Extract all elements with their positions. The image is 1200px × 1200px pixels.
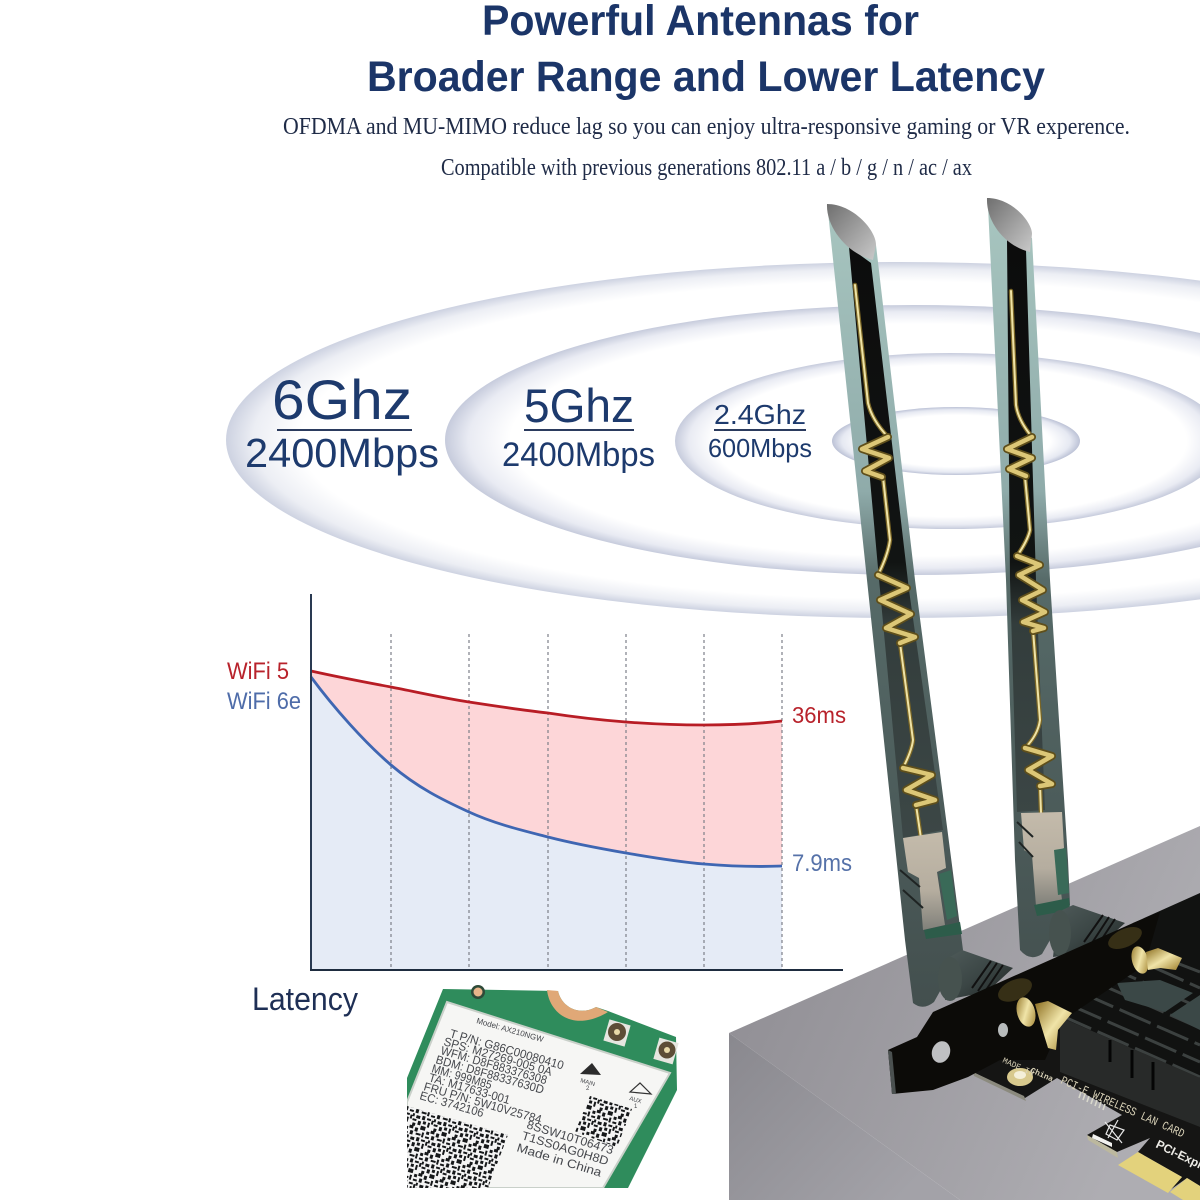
aux antenna marker: AUX <box>628 1096 642 1105</box>
module label text: WFM: D8F883376308 <box>439 1043 549 1087</box>
subtitle text <box>283 114 1130 181</box>
label: 6Ghz 2400Mbps: 6Ghz <box>272 368 412 431</box>
module label text: Made in China <box>515 1140 604 1180</box>
module label text: SPS: M27269-005 0A <box>442 1034 554 1079</box>
antenna tip cap <box>827 204 876 260</box>
value: 36ms: 36ms <box>792 702 846 728</box>
module label text: FRU P/N: 5W10V25784 <box>422 1079 544 1127</box>
circuit board <box>973 1000 1200 1190</box>
antenna inner core <box>1007 240 1045 812</box>
wifi pcie card <box>888 893 1200 1200</box>
label: 2.4Ghz 600Mbps: 600Mbps <box>708 433 812 463</box>
small data matrix code <box>575 1096 632 1147</box>
heatsink <box>1060 893 1200 1127</box>
module circuit board <box>407 989 677 1188</box>
front antenna <box>827 204 963 1007</box>
pads row <box>1079 1092 1105 1110</box>
label sticker <box>407 1002 670 1188</box>
antenna swivel front <box>938 950 1013 1001</box>
value: 7.9ms: 7.9ms <box>792 850 852 877</box>
mounting pad <box>471 985 485 999</box>
antenna body <box>988 206 1070 957</box>
antenna connector 1 <box>653 1038 679 1064</box>
bracket glare <box>994 974 1036 1006</box>
rear SMA connector <box>1129 944 1182 976</box>
coil wire <box>855 285 935 865</box>
module label text <box>418 1016 616 1180</box>
antenna base insert <box>1021 812 1064 906</box>
antenna base insert <box>903 832 946 930</box>
label: 2.4Ghz 600Mbps: 2.4Ghz <box>714 399 806 430</box>
antenna tip cap <box>987 198 1032 252</box>
title: Broader Range and Lower Latency <box>367 53 1045 101</box>
main antenna marker <box>579 1063 601 1092</box>
title <box>367 0 1045 101</box>
board silkscreen text <box>1001 1057 1200 1181</box>
module label text: MM: 999M85 <box>430 1061 494 1092</box>
metal bracket <box>888 912 1160 1094</box>
label: 5Ghz 2400Mbps <box>502 379 655 474</box>
module label text: BDM: D8F88337630D <box>434 1052 546 1097</box>
board silkscreen text: MADE IN <box>1001 1057 1035 1078</box>
aux antenna marker <box>628 1083 651 1110</box>
board silkscreen text: China <box>1029 1067 1055 1085</box>
module label text: T1SS0AG0H8D <box>520 1128 611 1168</box>
subtitle text: Compatible with previous generations 802.11 a / b / g / n / ac / ax <box>441 155 972 181</box>
gold edge fingers <box>1118 1152 1182 1193</box>
antenna swivel rear <box>1049 905 1125 957</box>
rear antenna <box>987 198 1070 957</box>
bracket screw hole <box>929 1039 953 1065</box>
label: 6Ghz 2400Mbps: 2400Mbps <box>245 430 439 476</box>
label: 6Ghz 2400Mbps <box>245 368 439 476</box>
label: 5Ghz 2400Mbps: 2400Mbps <box>502 436 655 474</box>
module label text: T P/N: G86C00080410 <box>448 1026 566 1072</box>
recycling mark <box>1092 1120 1124 1147</box>
legend: WiFi 6e: WiFi 6e <box>227 688 301 715</box>
label: 5Ghz 2400Mbps: 5Ghz <box>524 379 634 432</box>
front SMA connector <box>1013 995 1072 1050</box>
copper notch <box>547 990 608 1021</box>
module label text: Model: AX210NGW <box>475 1016 545 1044</box>
M.2 wifi module photo <box>407 985 679 1188</box>
board screw <box>1007 1068 1033 1086</box>
module label text: 8SSW10T06473 <box>525 1117 616 1157</box>
legend: WiFi 5: WiFi 5 <box>227 658 289 685</box>
main antenna marker: 2 <box>586 1086 590 1092</box>
module label text: TA: M17633-001 <box>427 1070 512 1107</box>
antenna inner core <box>849 247 943 838</box>
subtitle text: OFDMA and MU-MIMO reduce lag so you can enjoy ultra-responsive gaming or VR experence. <box>283 114 1130 140</box>
antenna body <box>828 212 963 1007</box>
antenna connector 2 <box>603 1019 631 1047</box>
aux antenna marker: 1 <box>634 1104 638 1110</box>
coil wire <box>1007 291 1052 840</box>
latency line chart <box>310 594 843 971</box>
gray box <box>729 826 1200 1200</box>
signal range rings <box>226 262 1200 618</box>
large data matrix code <box>407 1106 508 1188</box>
label: 2.4Ghz 600Mbps <box>708 399 812 463</box>
module label text: EC: 3742106 <box>418 1088 486 1120</box>
chart caption: Latency: Latency <box>252 981 358 1017</box>
main antenna marker: MAIN <box>579 1078 596 1088</box>
